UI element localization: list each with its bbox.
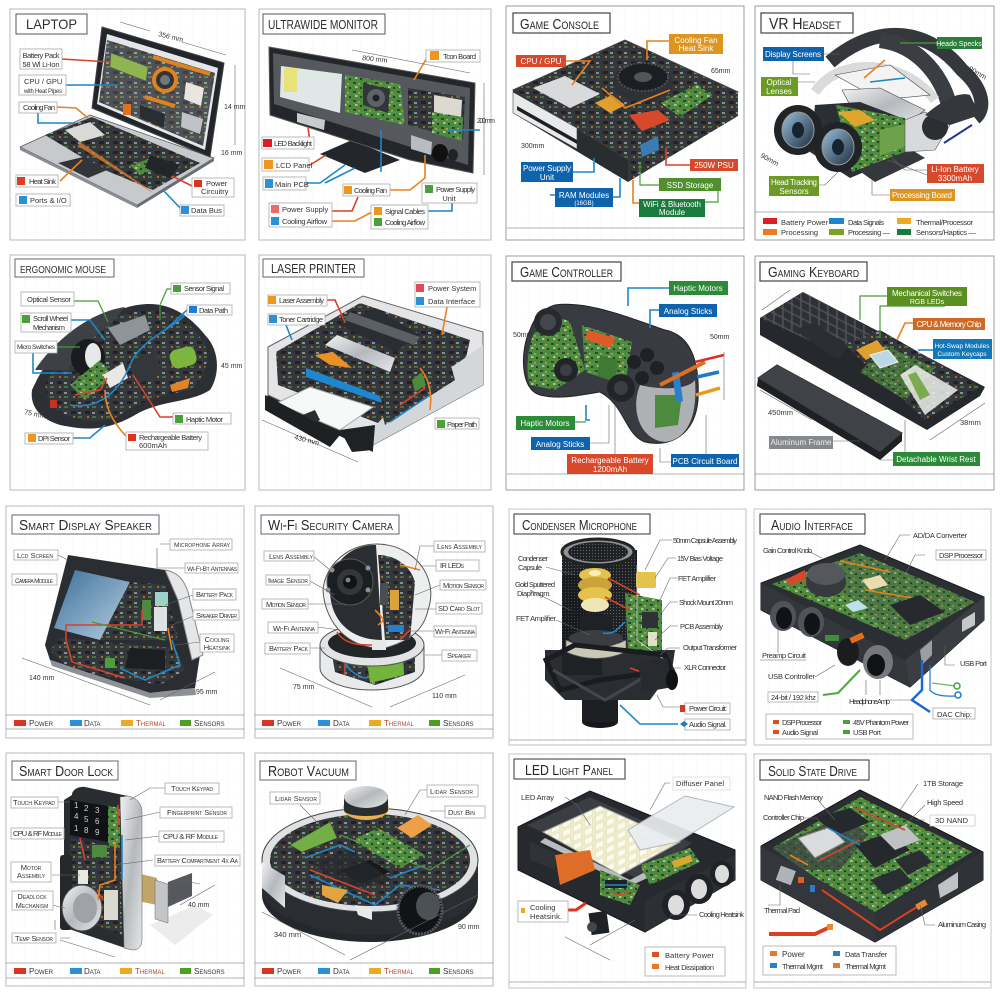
callouts: ssd: 3D NAND: [935, 816, 969, 825]
legend: smart display: Sensors: [194, 719, 225, 728]
panel: vr headset: [755, 6, 994, 240]
callouts: microphone: Shock Mount 20mm: [679, 598, 733, 607]
callouts: monitor: [262, 50, 495, 229]
callouts: headset: Display Screens: [765, 50, 821, 59]
callouts: smart display: [12, 539, 239, 705]
callouts: smart display: Battery Pack: [196, 590, 234, 599]
callouts: console: (16GB): [574, 201, 594, 207]
callouts: monitor: Power Supply: [282, 205, 329, 214]
callouts: microphone: FET Amplifier: [678, 574, 716, 583]
callouts: led panel: [509, 777, 746, 982]
callouts: audio interface: 45V Phantom Power: [853, 718, 910, 727]
callouts: monitor: LCD Panel: [276, 161, 313, 170]
callouts: led panel: Heat Dissipation: [665, 963, 714, 972]
legend: camera: Power: [277, 719, 302, 728]
panel: audio interface: [754, 509, 991, 745]
callouts: ssd: Thermal Pad: [764, 906, 800, 915]
legend: camera: Sensors: [443, 719, 474, 728]
callouts: headset: 90mm: [759, 153, 780, 168]
callouts: camera: Image Sensor: [268, 576, 308, 585]
callouts: headset: Sensors: [779, 187, 809, 196]
callouts: audio interface: 24-bit / 192 khz: [771, 693, 816, 702]
callouts: camera: Battery Pack: [269, 644, 309, 653]
callouts: headset: Processing Board: [892, 191, 952, 200]
heading: wi-fi security camera: Wi-Fi Security Camera: [268, 518, 393, 534]
callouts: camera: Motion Sensor: [443, 581, 484, 590]
callouts: printer: Toner Cartridge: [279, 315, 323, 324]
callouts: headset: Optical: [767, 78, 792, 87]
callouts: mouse: Scroll Wheel: [33, 314, 68, 323]
illustration: door lock cutaway: 1: [74, 824, 79, 833]
callouts: ssd: High Speed: [927, 798, 963, 807]
callouts: console: Cooling Fan: [674, 36, 718, 45]
illustration: printer cutaway: [265, 296, 483, 452]
callouts: smart display: Speaker Driver: [196, 611, 237, 620]
callouts: controller: Haptic Motors: [520, 419, 570, 428]
legend: camera: [255, 715, 493, 729]
callouts: robot vacuum: Lidar Sensor: [430, 787, 473, 796]
callouts: robot vacuum: [262, 785, 485, 960]
callouts: audio interface: USB Port: [960, 659, 988, 668]
callouts: laptop: Data Bus: [191, 206, 222, 215]
heading: game console: Game Console: [520, 16, 599, 33]
callouts: smart display: Microphone Array: [174, 542, 231, 549]
heading: condenser microphone: [514, 514, 650, 534]
heading: smart door lock: Smart Door Lock: [19, 764, 113, 780]
callouts: controller: Rechargeable Battery: [571, 456, 649, 465]
legend: robot vacuum: Thermal: [384, 967, 415, 976]
callouts: laptop: 58 Wl Li-Ion: [22, 60, 60, 69]
heading: vr headset: VR Headset: [769, 16, 841, 33]
callouts: led panel: Cooling Heatsink: [699, 910, 744, 919]
callouts: camera: Speaker: [447, 651, 471, 660]
illustration: smart display: [45, 555, 203, 698]
callouts: laptop: Circuitry: [201, 187, 229, 196]
panel: robot vacuum: [255, 753, 493, 986]
callouts: mouse: 75 mm: [24, 409, 46, 420]
callouts: door lock: Mechanism: [16, 901, 48, 910]
callouts: controller: 50mm: [710, 334, 730, 341]
callouts: laptop: CPU / GPU: [24, 77, 62, 86]
callouts: monitor: Unit: [442, 194, 457, 203]
heading: ultrawide monitor: ULTRAWIDE MONITOR: [268, 17, 378, 32]
callouts: headset: 90mm: [967, 66, 987, 82]
callouts: ssd: Controller Chip: [763, 813, 804, 822]
callouts: smart display: Lcd Screen: [17, 551, 53, 560]
callouts: monitor: Power Supply: [436, 185, 475, 194]
callouts: keyboard: Custom Keycaps: [937, 351, 987, 358]
legend: door lock: Sensors: [194, 967, 225, 976]
panel: laser printer: [259, 255, 491, 490]
illustration: door lock cutaway: 5: [84, 815, 89, 824]
heading: solid state drive: Solid State Drive: [768, 764, 857, 780]
callouts: printer: Laser Assembly: [279, 296, 324, 305]
callouts: monitor: Cooling Airflow: [282, 217, 328, 226]
legend: smart display: Thermal: [136, 719, 167, 728]
callouts: led panel: Cooling: [530, 903, 555, 912]
heading: laser printer: LASER PRINTER: [271, 261, 356, 276]
panel: game console: [506, 6, 744, 240]
callouts: laptop: 356 mm: [158, 31, 184, 44]
callouts: robot vacuum: Dust Bin: [448, 808, 475, 817]
illustration: door lock cutaway: 8: [84, 826, 89, 835]
callouts: controller: Analog Sticks: [536, 440, 584, 449]
callouts: console: RAM Modules: [559, 191, 609, 200]
callouts: smart display: Heatsink: [204, 643, 231, 652]
illustration: door lock cutaway: 6: [95, 817, 100, 826]
callouts: keyboard: RGB LEDs: [910, 299, 945, 306]
legend: door lock: Data: [84, 967, 101, 976]
panel: smart door lock: [6, 753, 244, 986]
legend: smart display: Power: [29, 719, 54, 728]
callouts: mouse: Data Path: [199, 306, 228, 315]
legend: vr headset: Sensors/Haptics —: [916, 228, 976, 237]
callouts: headset: Lenses: [766, 87, 792, 96]
callouts: controller: Analog Sticks: [664, 307, 712, 316]
callouts: door lock: Deadlock: [17, 892, 47, 901]
callouts: keyboard: Hot-Swap Modules: [935, 343, 990, 350]
illustration: led panel cutaway: [518, 791, 735, 935]
callouts: camera: Lens Assembly: [437, 542, 483, 551]
legend: smart display: [6, 715, 244, 729]
callouts: audio interface: Headphone Amp: [849, 697, 890, 706]
panel: game controller: [506, 256, 744, 490]
legend: smart display: Data: [84, 719, 101, 728]
callouts: console: WiFi & Bluetooth: [643, 200, 701, 209]
callouts: console: Power Supply: [523, 164, 571, 173]
callouts: printer: Paper Path: [447, 420, 477, 429]
callouts: camera: Wi-Fi Antenna: [435, 627, 476, 636]
callouts: audio interface: Gain Control Knob: [763, 546, 812, 555]
callouts: mouse: Sensor Signal: [184, 284, 224, 293]
callouts: camera: Lens Assembly: [269, 552, 314, 561]
callouts: ssd: [754, 779, 991, 982]
heading: laptop: [16, 14, 87, 34]
callouts: led panel: Diffuser Panel: [676, 779, 724, 788]
legend: vr headset: [755, 212, 994, 237]
illustration: camera cutaway: [320, 544, 431, 690]
illustration: door lock cutaway: 1: [74, 801, 79, 810]
callouts: controller: [507, 281, 744, 474]
callouts: audio interface: DSP Processor: [782, 718, 822, 727]
callouts: controller: 50mm: [513, 332, 533, 339]
callouts: microphone: Gold Sputtered: [515, 580, 555, 589]
illustration: audio interface cutaway: [761, 545, 984, 712]
legend: vr headset: Thermal/Processor: [916, 218, 974, 227]
callouts: microphone: PCB Assembly: [680, 622, 723, 631]
callouts: headset: [759, 37, 987, 201]
illustration: door lock cutaway: 3: [95, 806, 100, 815]
callouts: microphone: FET Amplifier: [516, 614, 556, 623]
illustration: door lock cutaway: [60, 787, 213, 950]
callouts: ssd: NAND Flash Memory: [764, 793, 823, 802]
callouts: microphone: Output Transformer: [683, 643, 738, 652]
callouts: controller: PCB Circuit Board: [673, 457, 737, 466]
callouts: keyboard: Aluminum Frame: [771, 438, 832, 447]
callouts: laptop: 14 mm: [224, 104, 246, 111]
panel: smart display speaker: [6, 506, 244, 738]
callouts: door lock: Assembly: [17, 871, 46, 880]
heading: led light panel: LED Light Panel: [525, 763, 613, 779]
legend: vr headset: Data Signals: [848, 218, 884, 227]
callouts: mouse: Haptic Motor: [186, 415, 224, 424]
illustration: console cutaway: [513, 40, 738, 182]
heading: gaming keyboard: Gaming Keyboard: [768, 265, 859, 281]
callouts: monitor: Tcon Board: [443, 52, 476, 61]
callouts: led panel: Battery Power: [665, 951, 714, 960]
callouts: console: SSD Storage: [667, 181, 714, 190]
callouts: door lock: Temp Sensor: [15, 934, 53, 943]
illustration: laptop cutaway: [20, 27, 224, 208]
callouts: console: Unit: [540, 173, 555, 182]
callouts: console: 65mm: [711, 68, 731, 75]
callouts: printer: Data Interface: [428, 297, 475, 306]
heading: audio interface: Audio Interface: [771, 518, 853, 534]
panel: laptop: [10, 9, 246, 240]
illustration: monitor cutaway: [269, 47, 475, 173]
callouts: laptop: Ports & I/O: [30, 196, 67, 205]
callouts: microphone: [509, 536, 746, 740]
callouts: camera: 75 mm: [293, 684, 315, 691]
callouts: keyboard: CPU & Memory Chip: [916, 320, 982, 329]
callouts: laptop: Battery Pack: [22, 51, 60, 60]
panel: solid state drive: [754, 754, 991, 988]
callouts: mouse: 45 mm: [221, 363, 243, 370]
callouts: ssd: Thermal Mgmt: [782, 962, 824, 971]
callouts: laptop: Cooling Fan: [23, 103, 55, 112]
callouts: smart display: Cooling: [205, 635, 230, 644]
callouts: monitor: 200 mm: [477, 118, 495, 125]
callouts: monitor: Cooling Airflow: [385, 218, 426, 227]
illustration: mouse cutaway: [32, 304, 217, 437]
callouts: door lock: CPU & RF Module: [13, 829, 63, 838]
illustration: microphone cutaway: [545, 539, 678, 728]
panel: ultrawide monitor: [259, 9, 495, 240]
illustration: keyboard cutaway: [757, 292, 985, 460]
callouts: monitor: LED Backlight: [274, 139, 313, 148]
legend: vr headset: Processing: [781, 228, 818, 237]
callouts: ssd: Power: [782, 950, 805, 959]
legend: door lock: [6, 963, 244, 978]
callouts: smart display: 140 mm: [29, 675, 54, 682]
heading: condenser microphone: Condenser Microphone: [522, 518, 637, 534]
panel: ergonomic mouse: [10, 255, 245, 490]
callouts: audio interface: USB Port: [853, 728, 882, 737]
illustration: door lock cutaway: 4: [74, 812, 79, 821]
callouts: audio interface: Preamp Circuit: [762, 651, 807, 660]
callouts: headset: 3300mAh: [938, 174, 972, 183]
callouts: door lock: Battery Compartment 4x Aa: [157, 856, 239, 865]
legend: camera: Data: [333, 719, 350, 728]
callouts: door lock: [11, 783, 240, 957]
callouts: laptop: Heat Sink: [29, 177, 56, 186]
callouts: mouse: Optical Sensor: [27, 295, 72, 304]
callouts: smart display: 95 mm: [196, 689, 218, 696]
callouts: microphone: 15V Bias Voltage: [677, 554, 723, 563]
callouts: monitor: Signal Cables: [385, 207, 425, 216]
callouts: smart display: Camera Module: [15, 578, 54, 585]
illustration: door lock cutaway: 9: [95, 828, 100, 837]
callouts: controller: Haptic Motors: [673, 284, 723, 293]
callouts: controller: 1200mAh: [593, 465, 627, 474]
panel: wi-fi security camera: [255, 506, 493, 738]
callouts: console: 300mm: [521, 143, 545, 150]
callouts: microphone: Diaphragm.: [517, 589, 551, 598]
callouts: door lock: 40 mm: [188, 902, 210, 909]
callouts: robot vacuum: 90 mm: [458, 924, 480, 931]
callouts: keyboard: Detachable Wrist Rest: [896, 455, 976, 464]
callouts: monitor: Main PCB: [275, 180, 309, 189]
callouts: laptop: [16, 22, 246, 216]
callouts: laptop: with Heat Pipes: [23, 89, 62, 95]
legend: camera: Thermal: [384, 719, 415, 728]
legend: robot vacuum: Data: [333, 967, 350, 976]
callouts: camera: Wi-Fi Antenna: [273, 624, 316, 633]
callouts: printer: Power System: [428, 284, 476, 293]
legend: door lock: Thermal: [135, 967, 166, 976]
heading: ergonomic mouse: ERGONOMIC MOUSE: [20, 264, 106, 276]
legend: robot vacuum: [255, 963, 493, 978]
callouts: robot vacuum: Lidar Sensor: [275, 794, 317, 803]
callouts: camera: Motion Sensor: [266, 600, 306, 609]
callouts: ssd: 1TB Storage: [923, 779, 963, 788]
callouts: console: CPU / GPU: [521, 57, 562, 66]
callouts: laptop: Power: [206, 179, 228, 188]
callouts: microphone: 50mm Capsule Assembly: [673, 536, 737, 545]
illustration: robot vacuum cutaway: [262, 786, 478, 942]
callouts: camera: IR LEDs: [440, 561, 465, 570]
callouts: audio interface: DSP Processor: [939, 551, 984, 560]
callouts: console: 250W PSU: [694, 161, 734, 170]
callouts: audio interface: DAC Chip:: [937, 710, 972, 719]
callouts: smart display: Wi-Fi-Bt Antennas: [187, 566, 238, 573]
callouts: laptop: 16 mm: [221, 150, 243, 157]
heading: laptop: LAPTOP: [26, 16, 77, 32]
heading: ultrawide monitor: [263, 14, 385, 34]
callouts: ssd: Aluminum Casing: [938, 920, 986, 929]
callouts: microphone: Capsule: [518, 563, 542, 572]
callouts: audio interface: USB Controller: [768, 672, 816, 681]
callouts: printer: 430 mm: [293, 434, 320, 448]
callouts: printer: [262, 282, 480, 462]
callouts: monitor: 800 mm: [362, 55, 388, 65]
callouts: microphone: Power Circuit:: [689, 704, 727, 713]
heading: game controller: Game Controller: [520, 264, 613, 281]
panel: led light panel: [509, 754, 746, 988]
legend: robot vacuum: Power: [277, 967, 302, 976]
callouts: robot vacuum: 340 mm: [274, 930, 301, 939]
illustration: headset cutaway: [774, 35, 981, 182]
callouts: keyboard: [755, 287, 994, 474]
callouts: console: [507, 34, 744, 228]
callouts: keyboard: 450mm: [768, 408, 793, 417]
illustration: ssd cutaway: [761, 790, 983, 942]
callouts: led panel: Heatsink.: [530, 912, 562, 921]
callouts: headset: Head Tracking: [771, 178, 817, 187]
illustration: controller cutaway: [523, 304, 724, 443]
callouts: camera: [262, 541, 486, 707]
panel: gaming keyboard: [755, 256, 994, 490]
callouts: door lock: Motor: [21, 863, 42, 872]
legend: vr headset: Processing —: [848, 228, 890, 237]
callouts: mouse: Rechargeable Battery: [139, 433, 202, 442]
heading: robot vacuum: Robot Vacuum: [268, 763, 349, 780]
callouts: microphone: Audio Signal.: [689, 720, 727, 729]
illustration: door lock cutaway: 2: [84, 804, 89, 813]
callouts: console: Heat Sink: [679, 44, 714, 53]
callouts: audio interface: AD/DA Converter: [913, 531, 968, 540]
callouts: mouse: Mechanism: [33, 323, 65, 332]
callouts: headset: Heado Specks: [936, 41, 982, 48]
callouts: door lock: CPU & RF Module: [163, 832, 219, 841]
callouts: mouse: DPI Sensor: [38, 434, 70, 443]
legend: door lock: Power: [29, 967, 54, 976]
legend: vr headset: Battery Power: [781, 218, 829, 227]
callouts: door lock: Fingerprint Sensor: [167, 808, 227, 817]
callouts: monitor: Cooling Fan: [354, 186, 387, 195]
heading: smart display speaker: Smart Display Speaker: [19, 518, 152, 534]
callouts: camera: SD Card Slot: [438, 604, 480, 613]
callouts: audio interface: [760, 531, 988, 739]
callouts: keyboard: Mechanical Switches: [892, 289, 962, 298]
panel: condenser microphone: [509, 509, 746, 745]
callouts: console: Module: [659, 208, 686, 217]
callouts: headset: Li-Ion Battery: [931, 165, 979, 174]
callouts: keyboard: 38mm: [960, 418, 981, 427]
callouts: microphone: Condenser: [518, 554, 548, 563]
callouts: door lock: Touch Keypad: [171, 784, 213, 793]
callouts: camera: 110 mm: [432, 693, 457, 700]
heading: ergonomic mouse: [15, 259, 114, 277]
callouts: mouse: 600mAh: [139, 441, 167, 450]
callouts: ssd: Thermal Mgmt: [845, 962, 887, 971]
callouts: mouse: Micro Switches: [17, 344, 56, 351]
callouts: mouse: [15, 283, 243, 450]
callouts: ssd: Data Transfer: [845, 950, 888, 959]
callouts: led panel: LED Array: [521, 793, 554, 802]
callouts: door lock: Touch Keypad: [13, 798, 55, 807]
callouts: microphone: XLR Connector: [684, 663, 726, 672]
legend: robot vacuum: Sensors: [443, 967, 474, 976]
callouts: audio interface: Audio Signal: [782, 728, 818, 737]
